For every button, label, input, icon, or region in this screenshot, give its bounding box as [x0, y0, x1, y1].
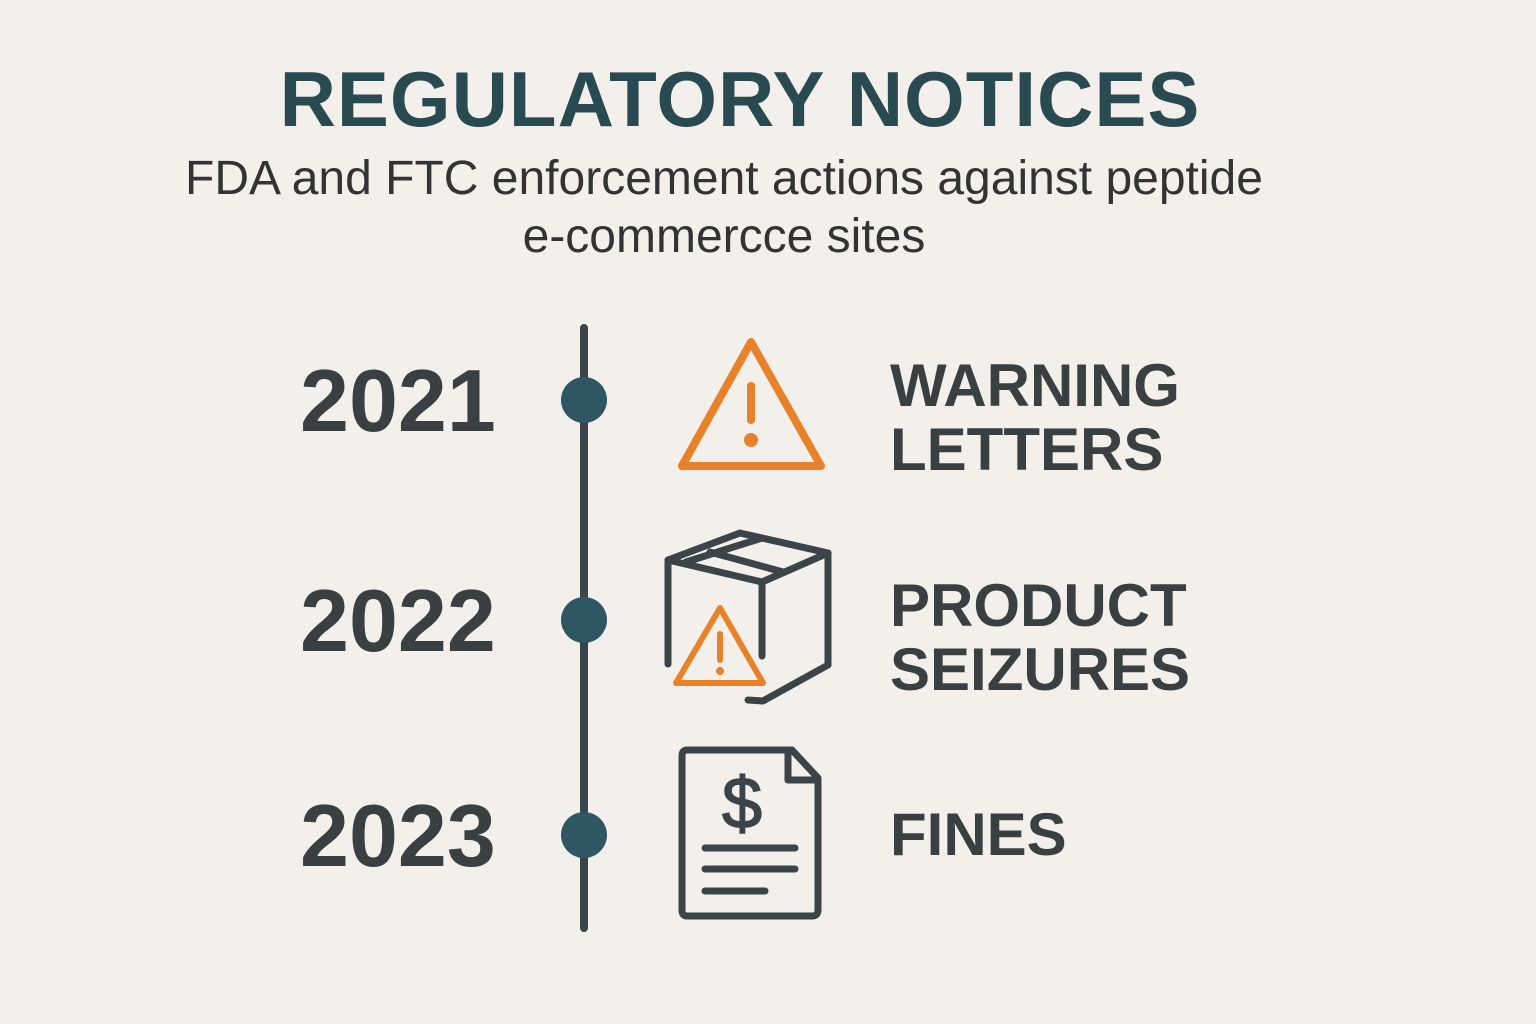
label: warning letters: WARNING — [890, 352, 1180, 419]
icon: warning triangle — [682, 342, 821, 466]
label: fines: FINES — [890, 801, 1067, 868]
label: product seizures: SEIZURES — [890, 636, 1190, 703]
subtitle — [185, 152, 1263, 263]
label: product seizures: PRODUCT — [890, 572, 1187, 639]
timeline dots — [561, 377, 607, 858]
title: REGULATORY NOTICES — [280, 55, 1200, 143]
year 2022: 2022 — [300, 571, 496, 670]
subtitle: e-commercce sites — [523, 210, 925, 263]
subtitle: FDA and FTC enforcement actions against peptide — [185, 152, 1263, 205]
timeline line — [580, 328, 588, 928]
year 2023: 2023 — [300, 786, 496, 885]
label: product seizures — [890, 572, 1190, 703]
label: warning letters — [890, 352, 1180, 483]
timeline: $ — [722, 764, 762, 844]
label: warning letters: LETTERS — [890, 416, 1163, 483]
year 2021: 2021 — [300, 351, 496, 450]
icon: fine document — [682, 750, 818, 916]
icon: box with warning — [668, 533, 828, 701]
